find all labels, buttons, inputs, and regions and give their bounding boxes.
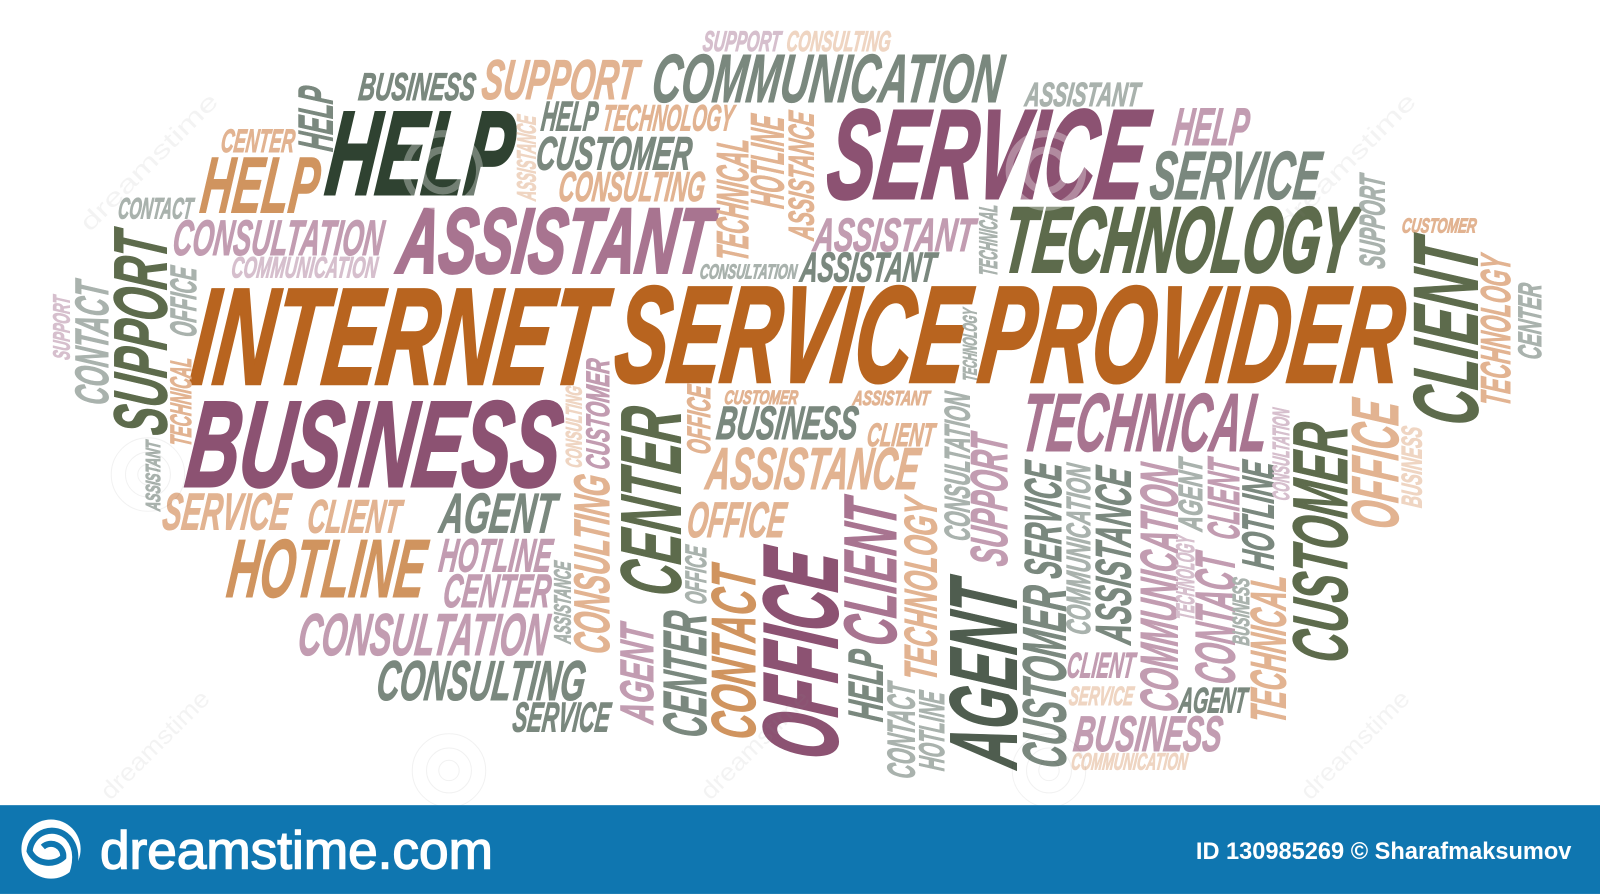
word: ASSISTANCE vertical tan: ASSISTANCE [781,109,821,242]
word: HELP grey: HELP [539,93,601,140]
word: ASSISTANT top: ASSISTANT [1023,76,1144,114]
watermark overlay: dreamstime [695,685,815,805]
word: TECHNOLOGY vertical small: TECHNOLOGY [960,306,982,382]
word: SUPPORT small: SUPPORT [701,26,784,58]
word: CONSULTING vertical peach: CONSULTING [562,384,587,469]
word: OFFICE tan: OFFICE [684,492,790,548]
word: CONTACT vertical grey: CONTACT [880,679,923,781]
word: TECHNOLOGY vertical right: TECHNOLOGY [1472,251,1519,408]
word: CUSTOMER vertical: CUSTOMER [1011,582,1079,771]
word: CONSULTING: CONSULTING [556,163,708,210]
word: ASSISTANT large: ASSISTANT [392,190,722,292]
word: BUSINESS: BUSINESS [357,66,478,109]
word: CONSULTING grey: CONSULTING [374,649,590,712]
word: BUSINESS centre: BUSINESS [714,396,861,449]
word: ASSISTANT peach: ASSISTANT [851,387,932,410]
word: CLIENT vertical small: CLIENT [1198,455,1249,542]
word: COMMUNICATION small: COMMUNICATION [230,252,380,285]
word: OFFICE vertical tan: OFFICE [680,382,717,456]
word: OFFICE vertical grey: OFFICE [680,543,713,606]
word: CONSULTING small: CONSULTING [785,26,893,58]
word: CLIENT vertical mauve: CLIENT [828,492,912,650]
word: CONSULTATION lower: CONSULTATION [295,601,554,668]
word: HELP large: HELP [320,87,522,220]
word: SUPPORT vertical small: SUPPORT [48,293,74,361]
word: SERVICE tan: SERVICE [160,484,295,542]
word cloud: TECHNICAL [975,202,1003,277]
word: CUSTOMER vertical large: CUSTOMER [1278,418,1364,666]
word: CUSTOMER: CUSTOMER [533,127,695,179]
word: CLIENT centre: CLIENT [865,416,939,453]
word: SERVICE vertical: SERVICE [1015,458,1073,581]
word: SUPPORT vertical right: SUPPORT [1353,171,1393,270]
word: SUPPORT: SUPPORT [479,48,644,111]
word: CENTER vertical right: CENTER [1511,281,1548,361]
word: CENTER vertical grey: CENTER [651,608,720,741]
word: SERVICE grey small: SERVICE [510,694,614,741]
word: HELP vertical: HELP [289,83,344,153]
word: HOTLINE vertical: HOTLINE [1233,457,1283,572]
word: CONTACT vertical tan: CONTACT [699,560,769,743]
word: OFFICE vertical right: OFFICE [1339,395,1413,533]
word: SUPPORT vertical mauve: SUPPORT [961,429,1019,569]
word: BUSINESS vertical small: BUSINESS [1228,576,1254,647]
word cloud [48,26,1548,781]
word: OFFICE vertical large: OFFICE [743,542,860,764]
word: SERVICE main: SERVICE [608,259,979,412]
word: INTERNET: INTERNET [185,261,617,414]
word: CONTACT vertical mauve: CONTACT [1184,548,1247,687]
word: CONSULTATION: CONSULTATION [170,210,388,266]
word: ASSISTANT vertical left: ASSISTANT [142,439,165,513]
image id and credit: ID 130985269 © Sharafmaksumov [1196,838,1572,865]
word: OFFICE vertical: OFFICE [163,264,204,339]
word: BUSINESS vertical peach: BUSINESS [1397,425,1428,509]
word: HOTLINE mauve: HOTLINE [437,529,556,581]
word: SUPPORT vertical: SUPPORT [99,224,183,439]
word: TECHNOLOGY tan: TECHNOLOGY [601,98,738,139]
footer band [0,805,1600,894]
word: CENTER: CENTER [219,122,297,159]
word: CENTER vertical: CENTER [604,402,700,600]
word: HELP mauve: HELP [1170,98,1253,157]
word: SERVICE peach: SERVICE [1068,681,1136,711]
word: CUSTOMER peach: CUSTOMER [723,387,799,409]
word: SERVICE large: SERVICE [821,83,1156,225]
word: AGENT grey: AGENT [436,482,563,545]
word: TECHNOLOGY vertical centre: TECHNOLOGY [895,493,947,683]
watermark overlay: dreamstime [75,88,224,237]
word: TECHNICAL: TECHNICAL [1017,376,1274,469]
word: CUSTOMER right: CUSTOMER [1401,215,1478,238]
word: COMMUNICATION vertical grey: COMMUNICATION [1060,461,1098,637]
word: CONSULTATION vertical: CONSULTATION [938,389,977,543]
word: CLIENT vertical: CLIENT [1395,230,1497,430]
word: AGENT vertical small: AGENT [1172,455,1210,533]
icon: spiral logo [21,819,81,882]
word: ASSISTANCE vertical: ASSISTANCE [512,113,542,202]
word: CONTACT vertical: CONTACT [65,276,118,407]
word: CONTACT: CONTACT [116,193,196,225]
word: ASSISTANT grey: ASSISTANT [798,244,941,291]
word: COMMUNICATION: COMMUNICATION [648,40,1009,117]
word: HELP vertical centre: HELP [839,647,894,724]
word: SERVICE grey: SERVICE [1146,137,1326,214]
logo wordmark: dreamstime.com [100,821,493,880]
word: TECHNICAL vertical tan: TECHNICAL [1241,571,1297,726]
watermark overlay: dreamstime [1273,88,1422,237]
word: HOTLINE tan: HOTLINE [223,522,433,615]
word: AGENT vertical mauve: AGENT [610,619,663,726]
word: COMMUNICATION peach: COMMUNICATION [1070,749,1190,774]
word: BUSINESS bottom: BUSINESS [1071,706,1226,762]
word: CUSTOMER vertical mauve: CUSTOMER [579,356,616,471]
word: CONSULTATION small: CONSULTATION [699,261,799,284]
word: HOTLINE vertical grey: HOTLINE [912,688,952,772]
word: CENTER mauve: CENTER [441,564,554,617]
word: AGENT bottom: AGENT [1177,680,1251,720]
word cloud: HOTLINE [741,111,794,210]
word: ASSISTANCE vertical grey: ASSISTANCE [549,559,575,645]
word: ASSISTANT mauve: ASSISTANT [810,208,980,261]
word: COMMUNICATION vertical mauve: COMMUNICATION [1131,460,1190,715]
watermark overlay: dreamstime [95,685,215,805]
word: HELP tan: HELP [197,141,325,229]
word: BUSINESS large: BUSINESS [180,376,570,512]
word cloud: TECHNICAL [707,135,758,264]
word: TECHNICAL vertical left: TECHNICAL [165,355,198,448]
word: CONSULTING vertical: CONSULTING [564,471,620,657]
word: CONSULTATION vertical pale: CONSULTATION [1268,406,1294,502]
watermark overlay: dreamstime [1295,685,1415,805]
word cloud: TECHNOLOGY [1172,533,1200,621]
word: CLIENT pale: CLIENT [1065,646,1139,686]
word: ASSISTANCE: ASSISTANCE [702,435,925,502]
word: ASSISTANCE vertical: ASSISTANCE [1086,463,1142,647]
watermark overlay [75,88,1422,807]
word: CLIENT tan: CLIENT [305,490,407,543]
word: AGENT vertical large: AGENT [931,571,1037,773]
